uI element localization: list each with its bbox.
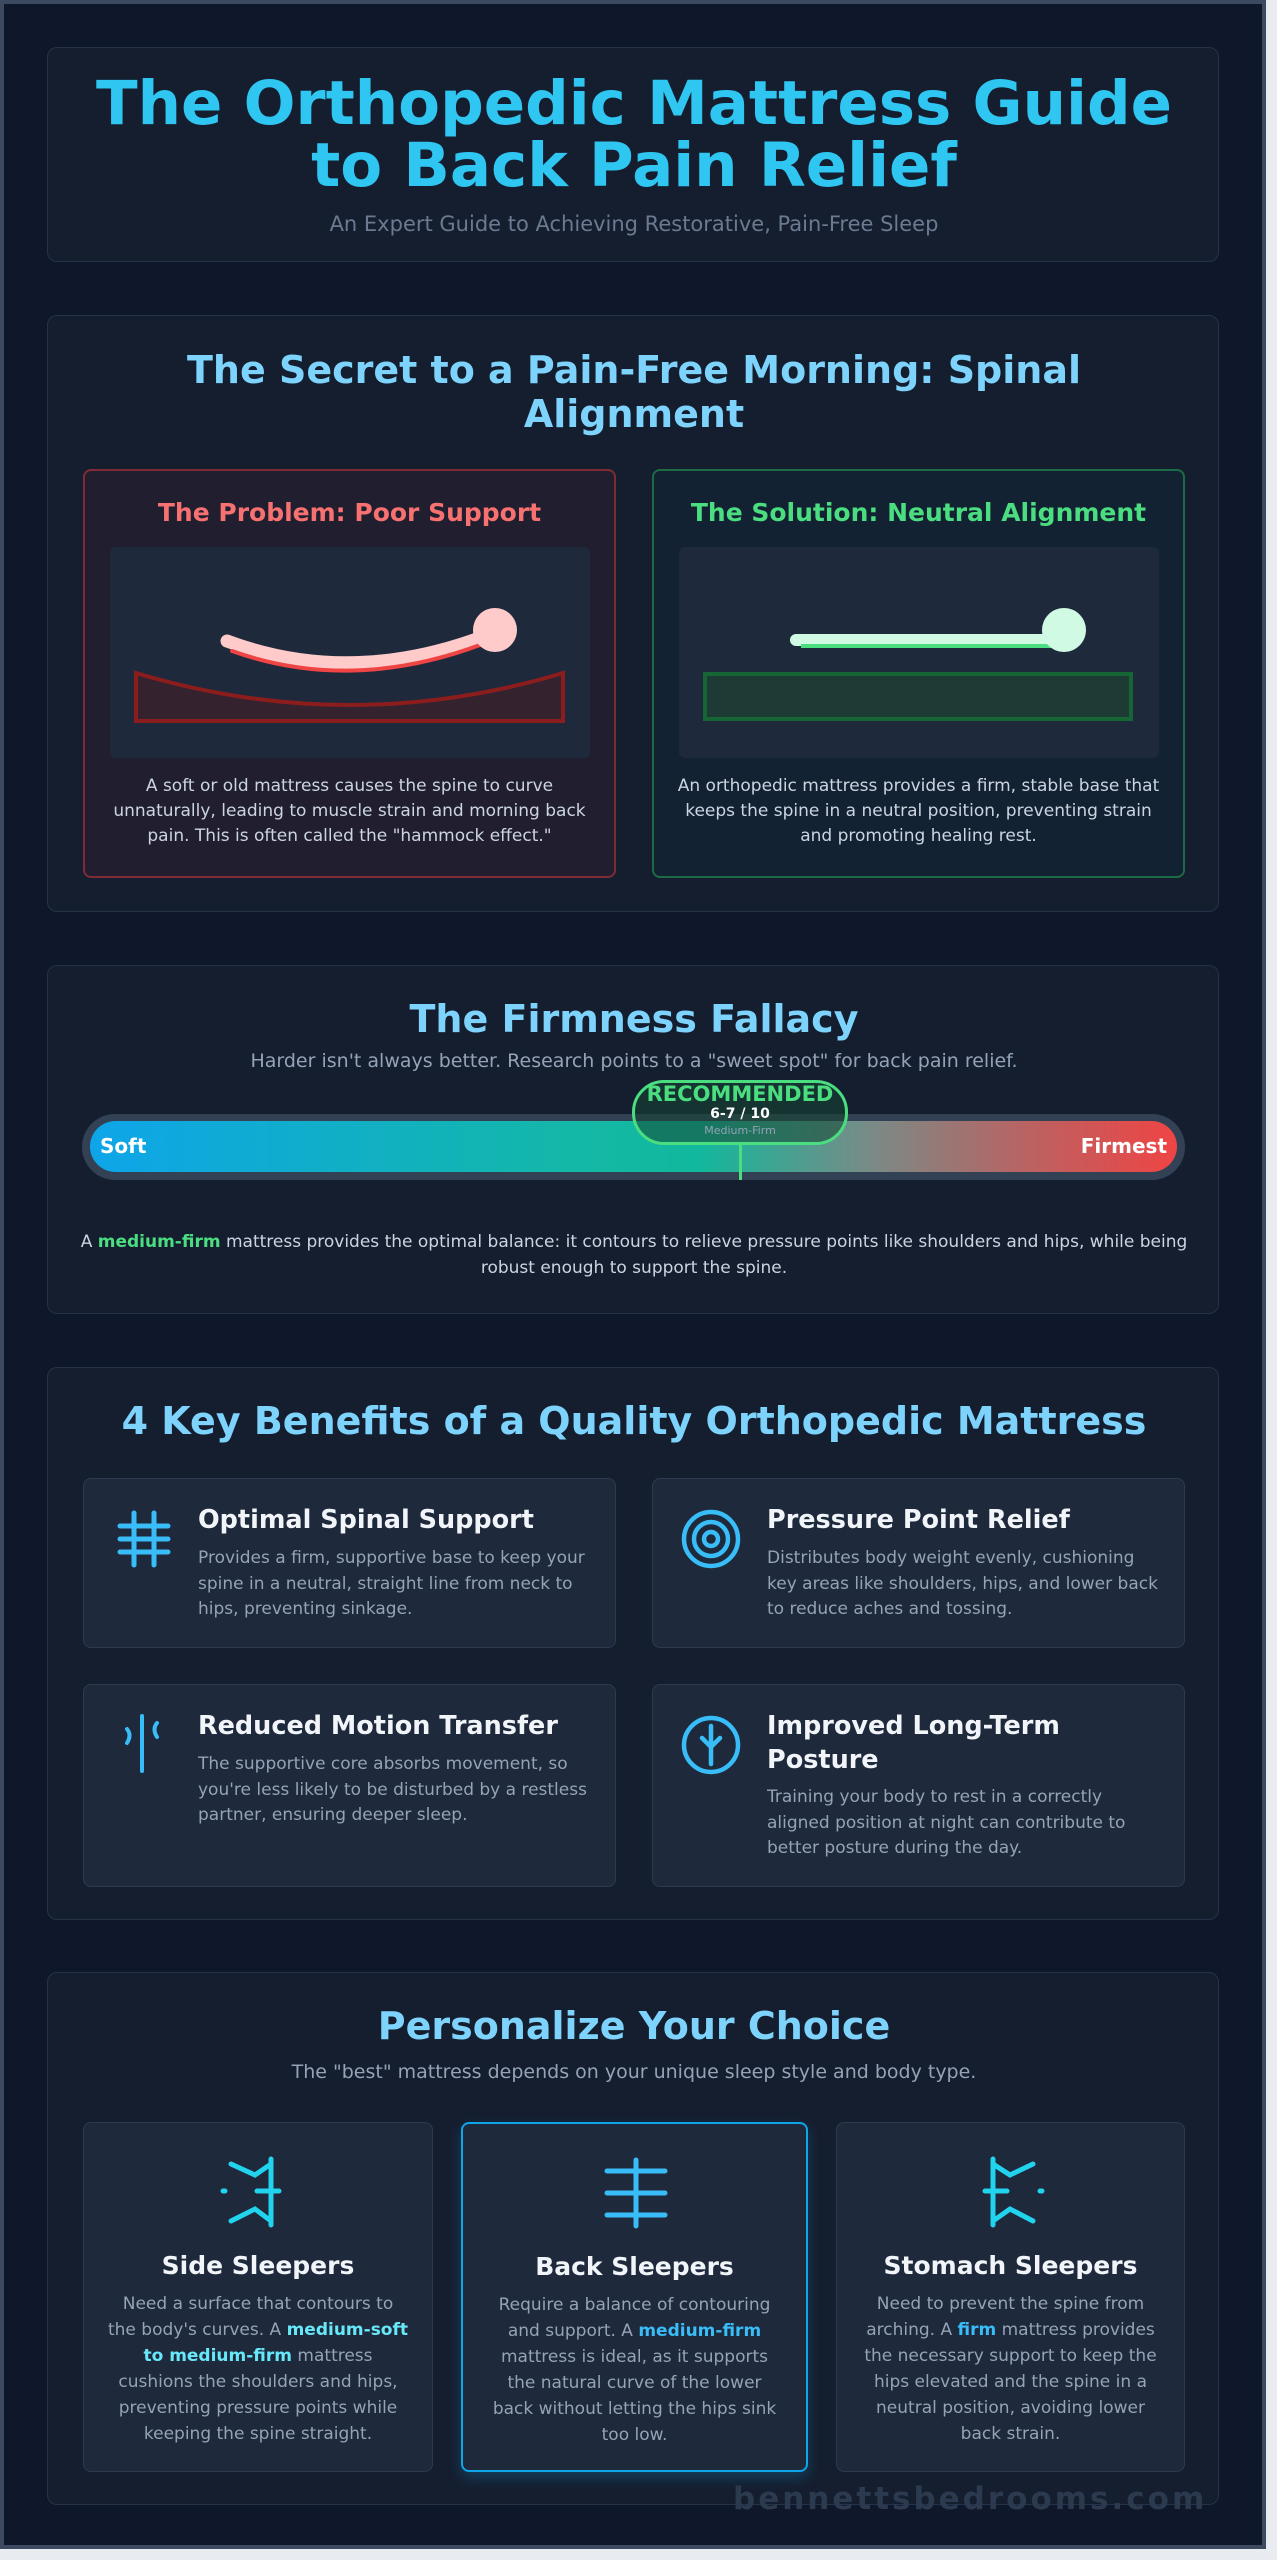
heading	[187, 348, 1081, 436]
title: Side Sleepers	[162, 2251, 354, 2280]
subtitle: An Expert Guide to Achieving Restorative, Pain-Free Sleep	[330, 212, 938, 236]
icon: motion	[124, 1714, 160, 1773]
icon: posture	[682, 1716, 740, 1774]
card: solution	[652, 469, 1185, 878]
solution title: The Solution: Neutral Alignment	[691, 498, 1146, 527]
text: to medium-firm mattress	[143, 2346, 373, 2366]
description: to reduce aches and tossing.	[767, 1599, 1012, 1619]
text: the natural curve of the lower	[507, 2373, 762, 2393]
text: back without letting the hips sink	[493, 2399, 776, 2419]
icon: target	[682, 1510, 740, 1568]
icon: stomach	[982, 2156, 1044, 2228]
description: Distributes body weight evenly, cushioning	[767, 1548, 1134, 1568]
panel: personalize	[47, 1972, 1219, 2505]
heading: The Secret to a Pain-Free Morning: Spinal	[187, 348, 1081, 392]
description: The supportive core absorbs movement, so	[198, 1754, 568, 1774]
explanation text	[80, 1232, 1187, 1278]
text: the body's curves. A medium-soft	[108, 2320, 408, 2340]
explanation text: robust enough to support the spine.	[481, 1258, 787, 1278]
header panel	[47, 47, 1219, 262]
card: side sleepers	[83, 2122, 433, 2472]
card: stomach sleepers	[836, 2122, 1185, 2472]
icon: grid	[118, 1510, 170, 1568]
text: neutral position, avoiding lower	[876, 2398, 1145, 2418]
text: the necessary support to keep the	[864, 2346, 1157, 2366]
recommended callout: Medium-Firm	[704, 1124, 776, 1137]
title	[767, 1711, 1060, 1775]
solution text: An orthopedic mattress provides a firm, stable base that	[678, 776, 1159, 796]
panel: spinal alignment	[47, 315, 1219, 912]
text	[493, 2295, 776, 2445]
text: mattress is ideal, as it supports	[501, 2347, 768, 2367]
title: The Orthopedic Mattress Guide	[96, 68, 1172, 139]
title: Reduced Motion Transfer	[198, 1711, 558, 1741]
heading: The Firmness Fallacy	[410, 997, 858, 1041]
subheading: Harder isn't always better. Research points to a "sweet spot" for back pain relief.	[250, 1050, 1018, 1072]
icon: back	[604, 2158, 668, 2228]
recommended callout	[632, 1080, 848, 1145]
benefit: pressure relief	[652, 1478, 1185, 1648]
title: Improved Long-Term	[767, 1711, 1060, 1741]
firmness scale bar	[82, 1114, 1185, 1180]
description	[198, 1548, 585, 1619]
benefit: spinal support	[83, 1478, 616, 1648]
text: back strain.	[961, 2424, 1060, 2444]
text: Need to prevent the spine from	[877, 2294, 1144, 2314]
benefit: motion transfer	[83, 1684, 616, 1887]
heading: 4 Key Benefits of a Quality Orthopedic Mattress	[122, 1399, 1146, 1443]
title: Stomach Sleepers	[884, 2251, 1137, 2280]
text: and support. A medium-firm	[508, 2321, 761, 2341]
title	[96, 68, 1172, 201]
title: Back Sleepers	[535, 2252, 734, 2281]
recommended callout: 6-7 / 10	[710, 1106, 770, 1122]
solution text: and promoting healing rest.	[800, 826, 1037, 846]
description: aligned position at night can contribute to	[767, 1812, 1125, 1832]
problem text	[113, 776, 586, 846]
text: hips elevated and the spine in a	[874, 2372, 1147, 2392]
panel: key benefits	[47, 1367, 1219, 1920]
description	[198, 1754, 587, 1825]
illustration: curved spine	[110, 547, 590, 758]
text: keeping the spine straight.	[144, 2424, 372, 2444]
problem title: The Problem: Poor Support	[158, 498, 541, 527]
text: Require a balance of contouring	[499, 2295, 770, 2315]
title: Posture	[767, 1745, 879, 1775]
solution text: keeps the spine in a neutral position, preventing strain	[685, 801, 1152, 821]
problem text: pain. This is often called the "hammock effect."	[147, 826, 552, 846]
title: to Back Pain Relief	[311, 130, 957, 201]
heading: Personalize Your Choice	[378, 2004, 890, 2048]
text: too low.	[602, 2425, 667, 2445]
title: Pressure Point Relief	[767, 1505, 1070, 1535]
card: problem	[83, 469, 616, 878]
description	[767, 1548, 1158, 1619]
text: arching. A firm mattress provides	[866, 2320, 1155, 2340]
recommended callout: RECOMMENDED	[647, 1082, 833, 1106]
title: Optimal Spinal Support	[198, 1505, 534, 1535]
explanation text: A medium-firm mattress provides the optimal balance: it contours to relieve pressure points like shoulders and hips, while being	[81, 1232, 1187, 1252]
description: you're less likely to be disturbed by a restless	[198, 1780, 587, 1800]
description: Provides a firm, supportive base to keep your	[198, 1548, 585, 1568]
label firmest: Firmest	[1081, 1134, 1167, 1158]
watermark: bennettsbedrooms.com	[733, 2481, 1207, 2517]
panel: firmness fallacy	[47, 965, 1219, 1314]
subheading: The "best" mattress depends on your unique sleep style and body type.	[292, 2061, 976, 2083]
description: Training your body to rest in a correctly	[767, 1787, 1102, 1807]
label soft: Soft	[100, 1134, 146, 1158]
problem text: unnaturally, leading to muscle strain and morning back	[113, 801, 586, 821]
illustration: straight spine	[679, 547, 1159, 758]
description: partner, ensuring deeper sleep.	[198, 1805, 468, 1825]
text	[108, 2294, 408, 2444]
description: key areas like shoulders, hips, and lower back	[767, 1574, 1158, 1594]
solution text	[678, 776, 1159, 846]
description: spine in a neutral, straight line from neck to	[198, 1574, 573, 1594]
description: better posture during the day.	[767, 1838, 1022, 1858]
card: back sleepers (highlighted)	[461, 2122, 808, 2472]
description: hips, preventing sinkage.	[198, 1599, 412, 1619]
text	[864, 2294, 1157, 2444]
text: cushions the shoulders and hips,	[118, 2372, 398, 2392]
text: preventing pressure points while	[119, 2398, 397, 2418]
description	[766, 1787, 1125, 1858]
heading: Alignment	[524, 392, 744, 436]
text: Need a surface that contours to	[123, 2294, 393, 2314]
marker line	[739, 1144, 742, 1180]
icon: side	[220, 2156, 282, 2228]
problem text: A soft or old mattress causes the spine to curve	[146, 776, 553, 796]
benefit: posture	[652, 1684, 1185, 1887]
